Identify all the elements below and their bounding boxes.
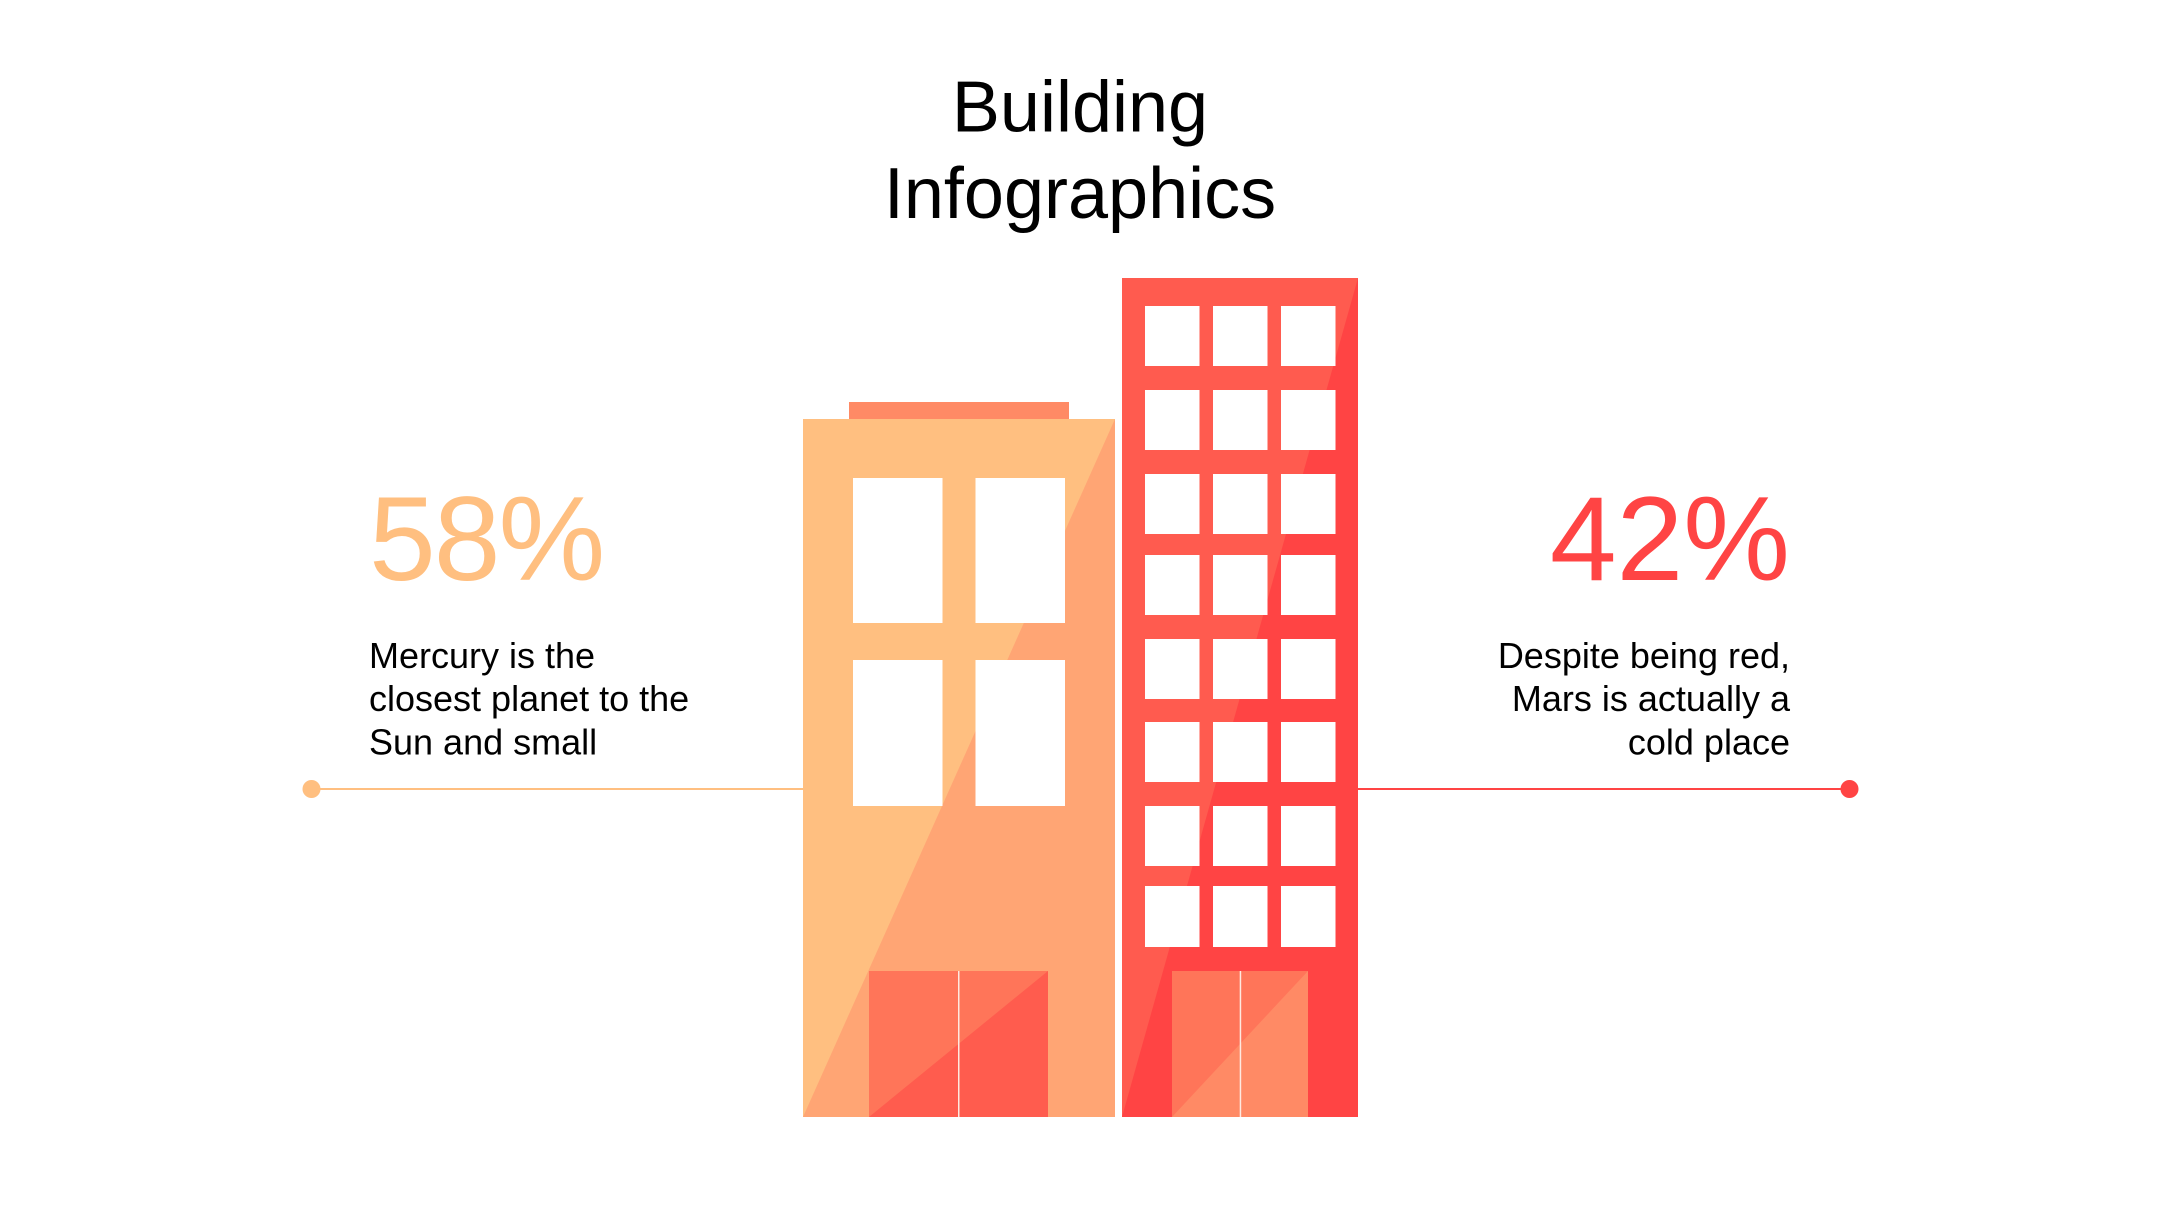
door <box>1172 971 1308 1117</box>
right description: cold place <box>1628 722 1790 762</box>
left description: Sun and small <box>369 722 597 762</box>
building body <box>1122 278 1358 1117</box>
right percentage: 42%: 42% <box>1550 472 1790 606</box>
windows <box>1145 306 1336 947</box>
roof <box>849 402 1069 420</box>
building shade <box>1122 278 1358 1117</box>
building shade <box>803 419 1115 1117</box>
left description: closest planet to the <box>369 678 689 719</box>
windows <box>853 478 1065 806</box>
right description: Mars is actually a <box>1512 678 1791 719</box>
title: Infographics <box>884 154 1276 234</box>
left connector line with dot <box>302 780 803 798</box>
left percentage: 58%: 58% <box>369 472 603 606</box>
building body <box>803 419 1115 1117</box>
orange building <box>803 402 1115 1117</box>
right description: Despite being red, <box>1498 635 1790 676</box>
red building <box>1122 278 1358 1117</box>
left description: Mercury is the <box>369 635 595 676</box>
title: Building <box>952 68 1208 148</box>
door <box>869 971 1048 1117</box>
right connector line with dot <box>1358 780 1858 798</box>
